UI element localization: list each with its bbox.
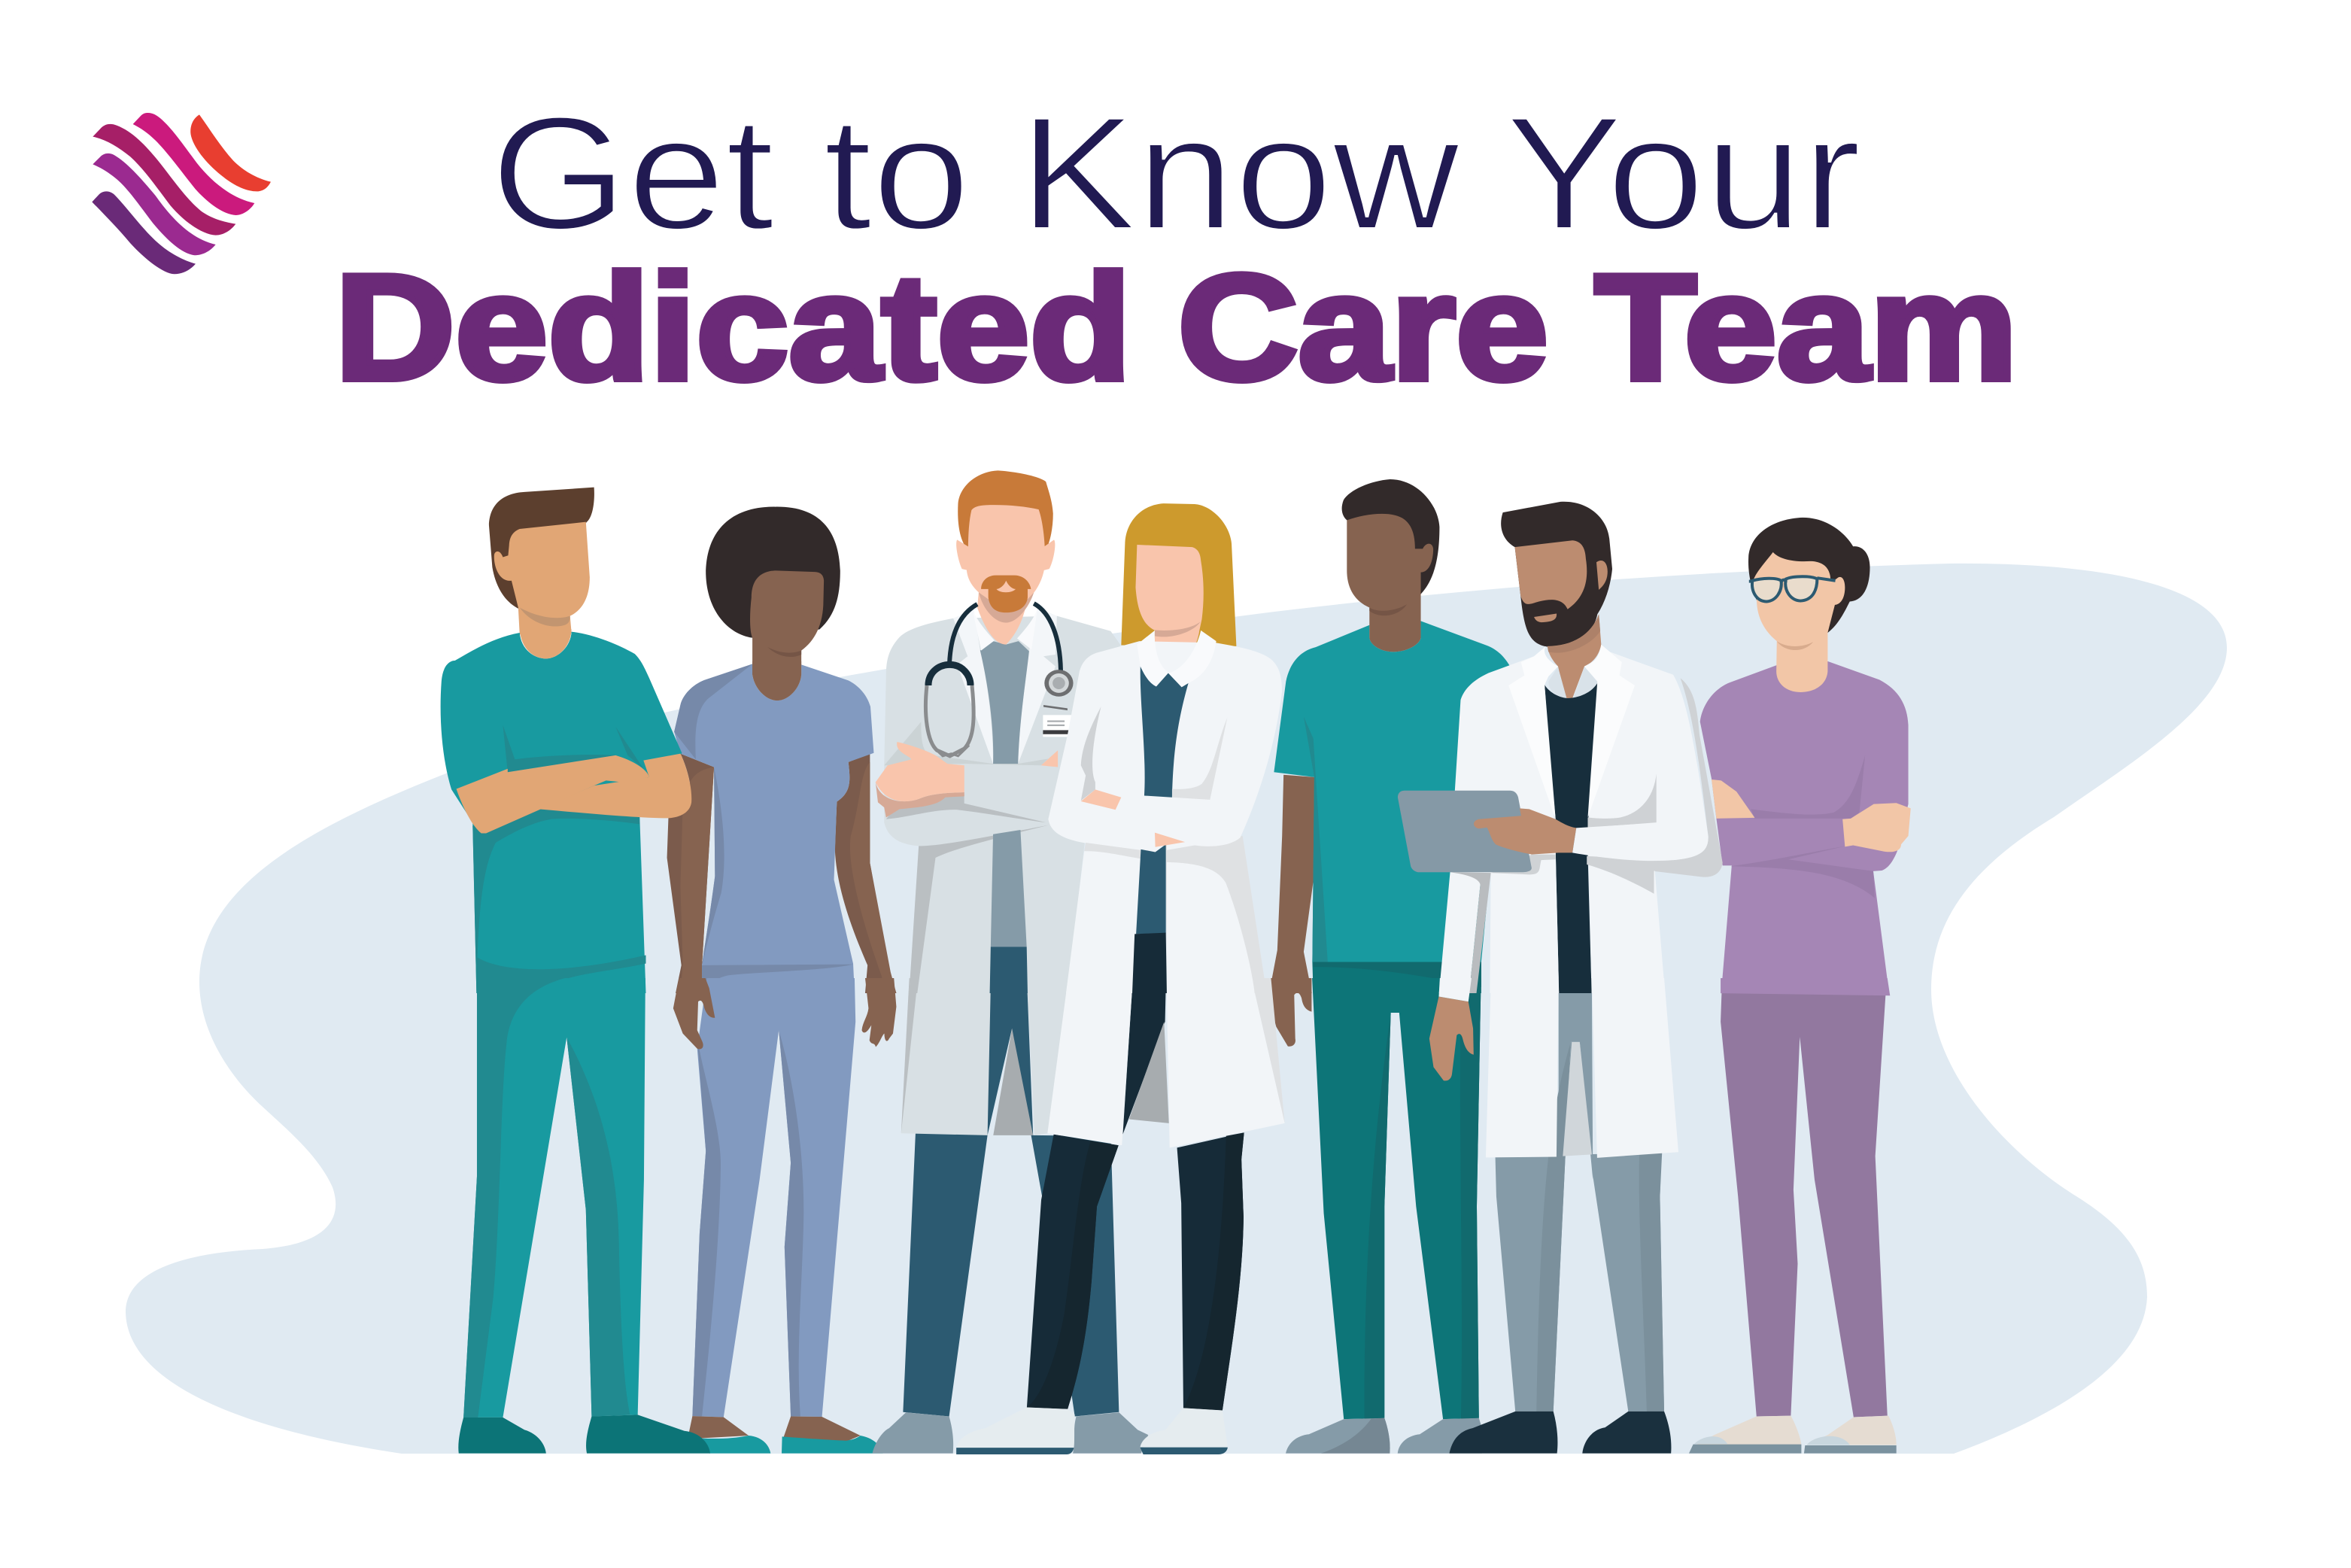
person: man in teal t-shirt [1268,479,1510,1454]
logo [92,113,271,274]
title line 1: Get to Know Your [491,84,1861,263]
legs [458,978,710,1454]
glasses [1749,576,1836,601]
person: nurse in teal scrubs [441,488,710,1454]
person: woman in purple with glasses [1689,518,1911,1454]
legs [1689,978,1897,1454]
crossed arms [457,754,691,833]
upper body [667,507,896,993]
legs [1268,978,1482,1454]
tablet [1398,791,1532,872]
person: bearded doctor with tablet [1398,502,1723,1454]
upper body [1398,502,1723,993]
upper body [441,488,691,993]
id badge [1043,705,1072,737]
person: blonde doctor [956,503,1285,1454]
stethoscope [925,603,1074,756]
folded arm [886,794,1046,822]
person: doctor with red beard and stethoscope [873,470,1148,1454]
person: nurse in blue scrubs [667,507,896,1454]
legs [1450,978,1678,1454]
legs [673,978,896,1454]
title line 2: Dedicated Care Team [335,244,2018,412]
upper body [1048,503,1282,993]
legs [956,978,1169,1454]
background blob [126,564,2227,1454]
hanging hand [1429,978,1474,1080]
sleeve [1572,822,1709,861]
upper body [1269,479,1510,993]
upper body [1700,518,1911,993]
legs [873,978,1148,1454]
upper body [876,470,1120,993]
hand on tablet [1474,808,1576,855]
